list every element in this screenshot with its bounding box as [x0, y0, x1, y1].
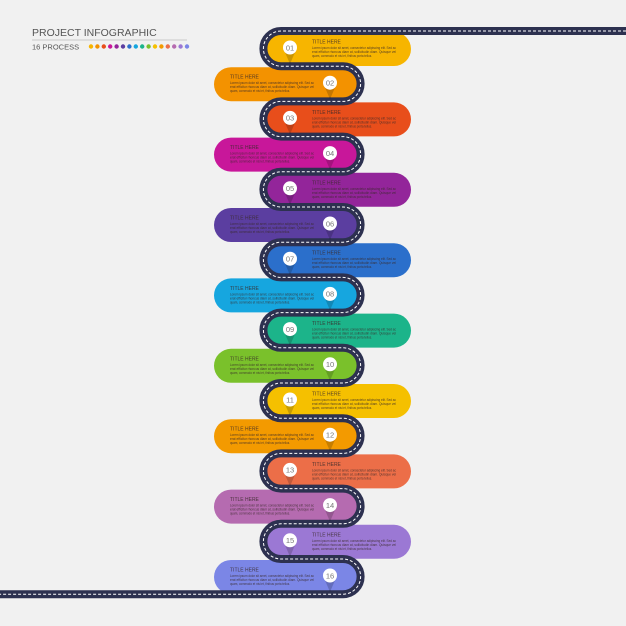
bar texts: quam, commodo et nisi et, finibus porta tellus.	[312, 54, 372, 58]
bar texts: erat efficitur rhoncus diam at, sollicitudin diam. Quisque vel	[312, 543, 396, 547]
pins: 01	[286, 43, 294, 52]
bar texts: TITLE HERE	[230, 497, 260, 503]
bar texts: Lorem ipsum dolor sit amet, consectetur adipiscing elit. Sed ac	[230, 574, 314, 578]
pins: 02	[326, 78, 334, 88]
pins: 12	[326, 430, 334, 440]
bar texts: Lorem ipsum dolor sit amet, consectetur adipiscing elit. Sed ac	[230, 363, 314, 367]
pins: 14	[326, 501, 334, 510]
title: PROJECT INFOGRAPHIC	[32, 27, 157, 39]
pins	[283, 40, 337, 592]
bar texts: Lorem ipsum dolor sit amet, consectetur adipiscing elit. Sed ac	[312, 398, 396, 402]
bar texts: quam, commodo et nisi et, finibus porta tellus.	[230, 371, 290, 375]
bar texts: Lorem ipsum dolor sit amet, consectetur adipiscing elit. Sed ac	[312, 539, 396, 543]
bar texts: Lorem ipsum dolor sit amet, consectetur adipiscing elit. Sed ac	[312, 116, 396, 120]
bar texts: Lorem ipsum dolor sit amet, consectetur adipiscing elit. Sed ac	[230, 433, 314, 437]
bar texts: erat efficitur rhoncus diam at, sollicitudin diam. Quisque vel	[230, 578, 314, 582]
bar texts: quam, commodo et nisi et, finibus porta tellus.	[312, 547, 372, 551]
pins: 09	[286, 325, 294, 334]
pins: 11	[286, 395, 294, 404]
bar texts: TITLE HERE	[230, 356, 260, 362]
bar texts: Lorem ipsum dolor sit amet, consectetur adipiscing elit. Sed ac	[230, 504, 314, 508]
bar texts: quam, commodo et nisi et, finibus porta tellus.	[230, 582, 290, 586]
bar texts	[230, 40, 396, 586]
title	[32, 27, 189, 52]
pins: 06	[326, 219, 334, 228]
bar texts: Lorem ipsum dolor sit amet, consectetur adipiscing elit. Sed ac	[230, 292, 314, 296]
bar texts: erat efficitur rhoncus diam at, sollicitudin diam. Quisque vel	[230, 508, 314, 512]
bar texts: TITLE HERE	[312, 321, 342, 327]
bar texts: erat efficitur rhoncus diam at, sollicitudin diam. Quisque vel	[230, 296, 314, 300]
pins: 13	[286, 466, 294, 475]
bar texts: erat efficitur rhoncus diam at, sollicitudin diam. Quisque vel	[230, 85, 314, 89]
bar texts: TITLE HERE	[312, 40, 342, 46]
bar texts: erat efficitur rhoncus diam at, sollicitudin diam. Quisque vel	[230, 437, 314, 441]
bar texts: quam, commodo et nisi et, finibus porta tellus.	[230, 160, 290, 164]
pins: 10	[326, 360, 334, 369]
pins: 16	[326, 571, 334, 580]
bar texts: TITLE HERE	[230, 427, 260, 433]
bar texts: TITLE HERE	[312, 180, 342, 186]
bar texts: erat efficitur rhoncus diam at, sollicitudin diam. Quisque vel	[312, 402, 396, 406]
title: 16 PROCESS	[32, 42, 79, 52]
pins: 07	[286, 254, 294, 264]
bar texts: TITLE HERE	[230, 145, 260, 151]
bar texts: erat efficitur rhoncus diam at, sollicitudin diam. Quisque vel	[312, 191, 396, 195]
bar texts: erat efficitur rhoncus diam at, sollicitudin diam. Quisque vel	[312, 332, 396, 336]
bar texts: TITLE HERE	[312, 532, 342, 538]
bar texts: quam, commodo et nisi et, finibus porta tellus.	[230, 89, 290, 93]
pins: 04	[326, 149, 334, 158]
bar texts: erat efficitur rhoncus diam at, sollicitudin diam. Quisque vel	[312, 261, 396, 265]
bar texts: TITLE HERE	[230, 75, 260, 81]
pins: 05	[286, 184, 294, 193]
bar texts: erat efficitur rhoncus diam at, sollicitudin diam. Quisque vel	[230, 367, 314, 371]
bar texts: TITLE HERE	[230, 286, 260, 292]
bar texts: erat efficitur rhoncus diam at, sollicitudin diam. Quisque vel	[312, 120, 396, 124]
bar texts: erat efficitur rhoncus diam at, sollicitudin diam. Quisque vel	[312, 472, 396, 476]
pins: 08	[326, 290, 334, 299]
bar texts: quam, commodo et nisi et, finibus porta tellus.	[230, 230, 290, 234]
bar texts: Lorem ipsum dolor sit amet, consectetur adipiscing elit. Sed ac	[230, 81, 314, 85]
pins: 03	[286, 114, 294, 123]
bar texts: Lorem ipsum dolor sit amet, consectetur adipiscing elit. Sed ac	[312, 187, 396, 191]
bar texts: erat efficitur rhoncus diam at, sollicitudin diam. Quisque vel	[230, 226, 314, 230]
bar texts: quam, commodo et nisi et, finibus porta tellus.	[312, 195, 372, 199]
bar texts: TITLE HERE	[312, 392, 342, 398]
bar texts: erat efficitur rhoncus diam at, sollicitudin diam. Quisque vel	[312, 50, 396, 54]
bar texts: quam, commodo et nisi et, finibus porta tellus.	[312, 265, 372, 269]
bar texts: Lorem ipsum dolor sit amet, consectetur adipiscing elit. Sed ac	[312, 46, 396, 50]
bar texts: TITLE HERE	[312, 462, 342, 468]
bar texts: quam, commodo et nisi et, finibus porta tellus.	[312, 124, 372, 128]
bar texts: TITLE HERE	[312, 251, 342, 257]
bar texts: Lorem ipsum dolor sit amet, consectetur adipiscing elit. Sed ac	[230, 152, 314, 156]
bar texts: quam, commodo et nisi et, finibus porta tellus.	[312, 476, 372, 480]
bar texts: quam, commodo et nisi et, finibus porta tellus.	[230, 512, 290, 516]
bar texts: quam, commodo et nisi et, finibus porta tellus.	[312, 336, 372, 340]
bars	[214, 32, 411, 594]
bar texts: quam, commodo et nisi et, finibus porta tellus.	[230, 441, 290, 445]
bar texts: Lorem ipsum dolor sit amet, consectetur adipiscing elit. Sed ac	[312, 257, 396, 261]
pins: 15	[286, 536, 294, 545]
bar texts: erat efficitur rhoncus diam at, sollicitudin diam. Quisque vel	[230, 156, 314, 160]
bar texts: Lorem ipsum dolor sit amet, consectetur adipiscing elit. Sed ac	[230, 222, 314, 226]
bar texts: Lorem ipsum dolor sit amet, consectetur adipiscing elit. Sed ac	[312, 328, 396, 332]
bar texts: quam, commodo et nisi et, finibus porta tellus.	[230, 300, 290, 304]
bar texts: Lorem ipsum dolor sit amet, consectetur adipiscing elit. Sed ac	[312, 468, 396, 472]
bar texts: TITLE HERE	[312, 110, 342, 116]
bar texts: TITLE HERE	[230, 568, 260, 574]
bar texts: quam, commodo et nisi et, finibus porta tellus.	[312, 406, 372, 410]
bar texts: TITLE HERE	[230, 216, 260, 222]
